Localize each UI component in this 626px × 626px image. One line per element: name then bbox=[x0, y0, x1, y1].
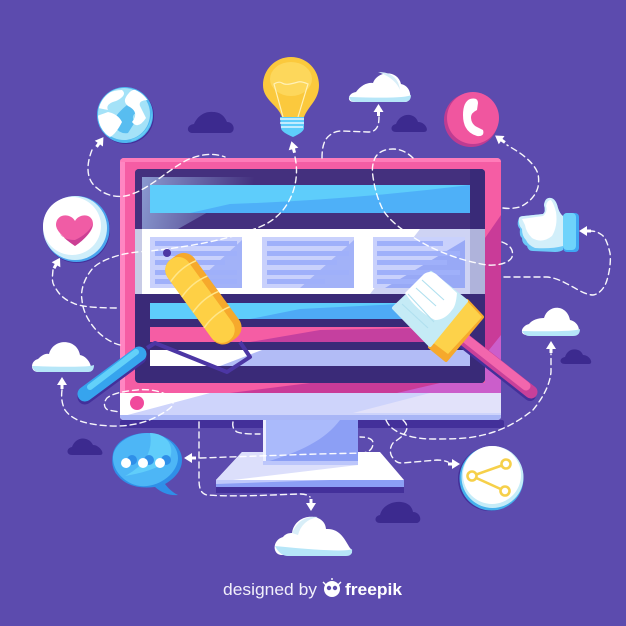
monitor frame bbox=[120, 158, 501, 420]
monitor shadow bbox=[120, 420, 504, 428]
icon: share badge bbox=[458, 446, 524, 511]
cloud dark 2 bbox=[392, 115, 427, 132]
footer credit bbox=[223, 578, 403, 599]
white bar bbox=[150, 350, 470, 366]
screen bbox=[135, 169, 485, 383]
pink bar bbox=[150, 327, 470, 342]
stand neck bbox=[263, 420, 358, 465]
content band bbox=[135, 229, 485, 294]
footer credit: designed by bbox=[223, 580, 318, 599]
roller frame bbox=[147, 342, 250, 372]
cloud dark 4 bbox=[68, 438, 102, 455]
roller drum bbox=[160, 248, 247, 350]
monitor bbox=[120, 158, 504, 493]
brush bristles bbox=[394, 272, 466, 345]
card 3 bbox=[373, 237, 465, 288]
brush ferrule bbox=[430, 301, 482, 360]
top blue bar bbox=[150, 185, 470, 213]
icon: thumbs up bbox=[518, 198, 579, 252]
monitor chin bbox=[120, 393, 501, 420]
paint brush bbox=[394, 272, 531, 395]
cloud dark 5 bbox=[376, 502, 420, 523]
icon: freepik mascot bbox=[323, 578, 341, 597]
card 1 bbox=[150, 237, 242, 288]
roller handle bbox=[85, 352, 139, 397]
cloud dark 3 bbox=[560, 349, 591, 364]
cloud white right bbox=[522, 308, 580, 336]
footer credit: freepik bbox=[345, 580, 403, 599]
icon: globe bbox=[97, 87, 154, 144]
card 2 bbox=[262, 237, 354, 288]
stand base bbox=[216, 452, 404, 493]
brush handle bbox=[464, 338, 531, 395]
paint roller bbox=[85, 248, 250, 397]
icon: light bulb bbox=[263, 57, 319, 137]
power button bbox=[130, 396, 144, 410]
roller axle bbox=[163, 249, 171, 257]
arrowheads bbox=[50, 104, 591, 511]
cloud dark 1 bbox=[188, 112, 234, 133]
dashed connectors bbox=[52, 117, 610, 497]
icon: phone badge bbox=[444, 92, 499, 147]
icon: chat bubble bbox=[112, 433, 182, 495]
blue bar 2 bbox=[150, 303, 402, 319]
icon: heart badge bbox=[43, 196, 110, 263]
cloud white top bbox=[349, 72, 411, 102]
cloud white bottom bbox=[275, 517, 352, 556]
cloud white left bbox=[32, 342, 94, 372]
